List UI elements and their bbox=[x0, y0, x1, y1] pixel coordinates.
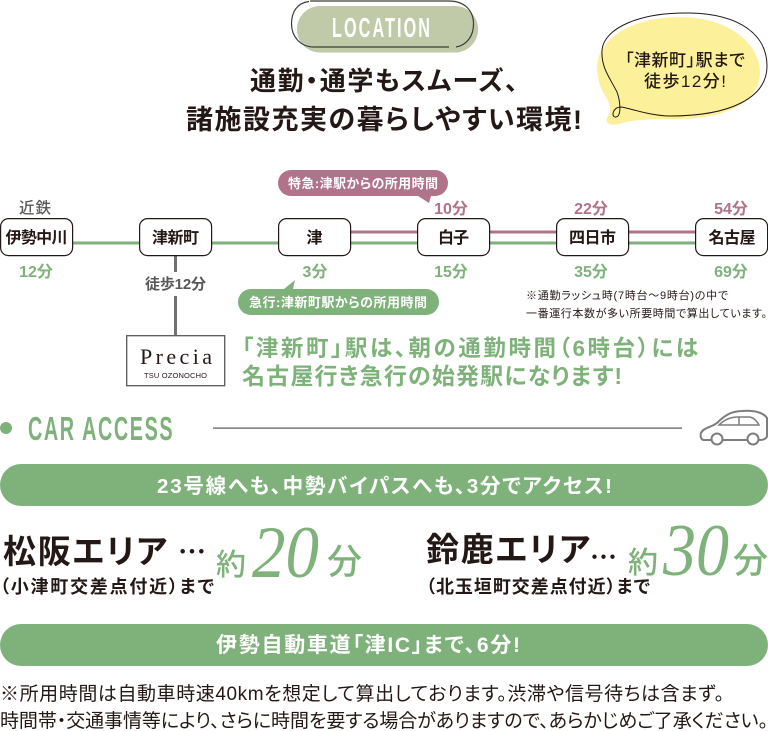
area: Matsusaka: 松阪エリア bbox=[3, 533, 167, 570]
footnote bbox=[0, 683, 768, 731]
station: 四日市: 22分 bbox=[574, 200, 608, 218]
area: Matsusaka bbox=[0, 512, 362, 597]
station: 津新町 bbox=[140, 219, 212, 256]
station: 白子: 10分 bbox=[434, 200, 468, 218]
callout: limited express: 特急:津駅からの所用時間 bbox=[288, 176, 438, 191]
banner: route 23 bbox=[0, 464, 768, 506]
speech bubble: walking time: 「津新町」駅まで bbox=[625, 51, 745, 70]
area: Matsusaka: … bbox=[178, 531, 206, 571]
area: Suzuka: 約 bbox=[628, 547, 658, 580]
Precia logo box bbox=[127, 336, 225, 386]
banner: route 23: 23号線へも、中勢バイパスへも、3分でアクセス! bbox=[157, 475, 612, 498]
station: 名古屋 bbox=[696, 200, 768, 281]
callout: express: 急行:津新町駅からの所用時間 bbox=[249, 295, 427, 310]
station: 津: 津 bbox=[306, 229, 323, 247]
speech bubble: walking time: 徒歩12分! bbox=[644, 72, 726, 91]
title: 諸施設充実の暮らしやすい環境! bbox=[186, 105, 582, 135]
station: 津新町: 津新町 bbox=[152, 229, 199, 247]
area: Suzuka: 鈴鹿エリア bbox=[426, 531, 590, 568]
icon: car bbox=[701, 411, 767, 444]
station: 伊勢中川: 12分 bbox=[19, 263, 53, 281]
walking connector: 徒歩12分 bbox=[145, 275, 206, 293]
green message: 「津新町」駅は、朝の通勤時間（6時台）には bbox=[242, 336, 698, 361]
banner: expressway bbox=[0, 624, 768, 666]
note on commuting time bbox=[526, 288, 767, 320]
speech bubble: walking time bbox=[597, 13, 767, 125]
label: Kintetsu: 近鉄 bbox=[19, 199, 51, 217]
station: 名古屋: 69分 bbox=[714, 263, 748, 281]
green message bbox=[242, 336, 698, 389]
station: 白子: 白子 bbox=[438, 229, 469, 247]
station: 津 bbox=[279, 219, 351, 281]
area: Matsusaka: 20 bbox=[252, 512, 319, 594]
area: Matsusaka: 約 bbox=[216, 549, 246, 582]
area: Suzuka: 分 bbox=[733, 542, 768, 581]
station: 四日市 bbox=[557, 200, 629, 281]
location badge bbox=[292, 1, 478, 52]
walking connector bbox=[143, 256, 208, 335]
station: 津: 3分 bbox=[303, 263, 327, 281]
banner: expressway: 伊勢自動車道「津IC」まで、6分! bbox=[216, 634, 520, 657]
location badge: LOCATION bbox=[332, 11, 430, 43]
area: Matsusaka: （小津町交差点付近）まで bbox=[0, 577, 214, 597]
station: 白子: 15分 bbox=[434, 263, 468, 281]
note on commuting time: ※通勤ラッシュ時(7時台〜9時台)の中で bbox=[526, 288, 728, 302]
green message: 名古屋行き急行の始発駅になります! bbox=[242, 363, 622, 389]
title bbox=[186, 66, 582, 135]
station: 四日市: 四日市 bbox=[569, 228, 616, 247]
area: Suzuka: （北玉垣町交差点付近）まで bbox=[426, 577, 650, 597]
station: 白子 bbox=[418, 200, 490, 281]
Precia logo box: Precia bbox=[140, 344, 212, 369]
area: Suzuka: … bbox=[590, 536, 617, 575]
station: 伊勢中川 bbox=[1, 219, 73, 281]
Precia logo box: TSU OZONOCHO bbox=[144, 371, 207, 380]
callout: limited express bbox=[278, 170, 448, 203]
station: 名古屋: 54分 bbox=[714, 200, 748, 218]
station: 名古屋: 名古屋 bbox=[708, 229, 756, 247]
area: Suzuka: 30 bbox=[662, 510, 729, 592]
station: 伊勢中川: 伊勢中川 bbox=[6, 229, 68, 247]
station: 四日市: 35分 bbox=[574, 263, 608, 281]
area: Matsusaka: 分 bbox=[327, 543, 362, 582]
area: Suzuka bbox=[426, 510, 768, 597]
callout: express bbox=[238, 280, 439, 315]
heading rule bbox=[213, 428, 682, 429]
railway lines bbox=[73, 230, 695, 244]
car access heading: CAR ACCESS bbox=[28, 410, 173, 447]
footnote: ※所用時間は自動車時速40kmを想定して算出しております。渋滞や信号待ちは含まず。 bbox=[0, 683, 724, 705]
note on commuting time: 一番運行本数が多い所要時間で算出しています。 bbox=[526, 306, 767, 320]
title: 通勤・通学もスムーズ、 bbox=[250, 66, 518, 96]
